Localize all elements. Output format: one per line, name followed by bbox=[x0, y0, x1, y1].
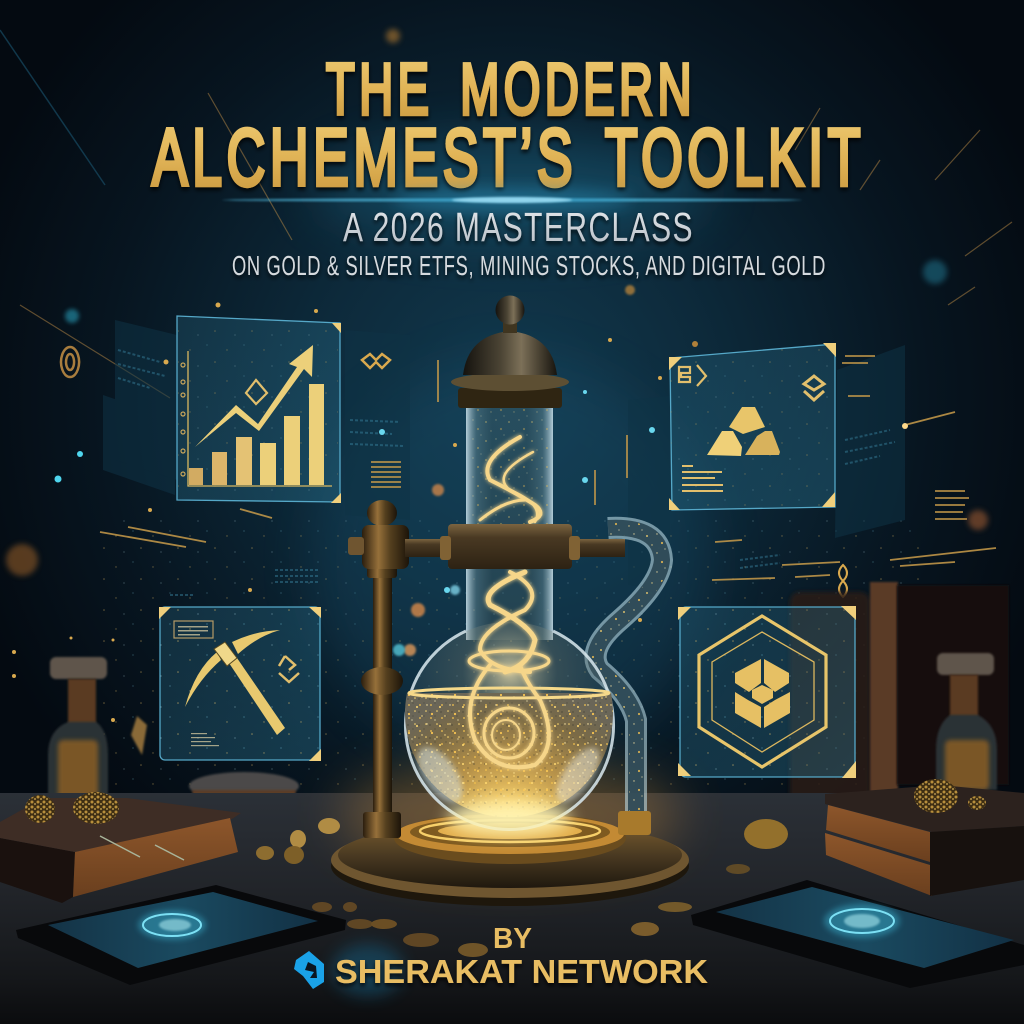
collar clamp bbox=[440, 524, 580, 569]
panel: gold bars bbox=[669, 343, 836, 510]
right books bbox=[825, 785, 1024, 896]
alchemy flask apparatus bbox=[331, 296, 689, 906]
right tablet bbox=[691, 880, 1024, 988]
panel: growth chart bbox=[177, 316, 341, 503]
glass side tube bbox=[596, 528, 662, 815]
byline: SHERAKAT NETWORK bbox=[335, 953, 708, 990]
left tablet bbox=[16, 885, 346, 985]
title: THE MODERN bbox=[326, 50, 696, 130]
icon: Sherakat logo bbox=[294, 944, 404, 996]
swirling gold helix bbox=[469, 437, 549, 767]
title bbox=[152, 50, 865, 203]
byline: BY bbox=[493, 923, 532, 955]
left book bbox=[0, 798, 241, 903]
arrow: rising trend bbox=[195, 345, 313, 447]
panel: pickaxe bbox=[159, 607, 321, 761]
glass column bbox=[466, 405, 553, 640]
icon: hexagon block bbox=[699, 616, 826, 767]
icon: pickaxe bbox=[185, 630, 285, 735]
round bulb bbox=[405, 622, 614, 835]
dome lid bbox=[451, 296, 569, 408]
gold nuggets bbox=[25, 779, 986, 957]
glowing divider bbox=[222, 188, 802, 212]
subtitle: A 2026 MASTERCLASS bbox=[343, 204, 694, 250]
table surface bbox=[0, 793, 1024, 1024]
subtitle bbox=[232, 204, 826, 281]
panel: digital gold hexagon bbox=[678, 606, 856, 778]
glow behind flask bbox=[340, 760, 680, 870]
back shelf books and bottles bbox=[48, 582, 1009, 829]
icon: stacked gold bars bbox=[707, 407, 780, 456]
bar chart bbox=[189, 384, 324, 485]
byline bbox=[294, 923, 708, 996]
horizontal arm bbox=[405, 539, 625, 557]
flask base bbox=[331, 812, 689, 906]
stand pole bbox=[348, 500, 409, 838]
